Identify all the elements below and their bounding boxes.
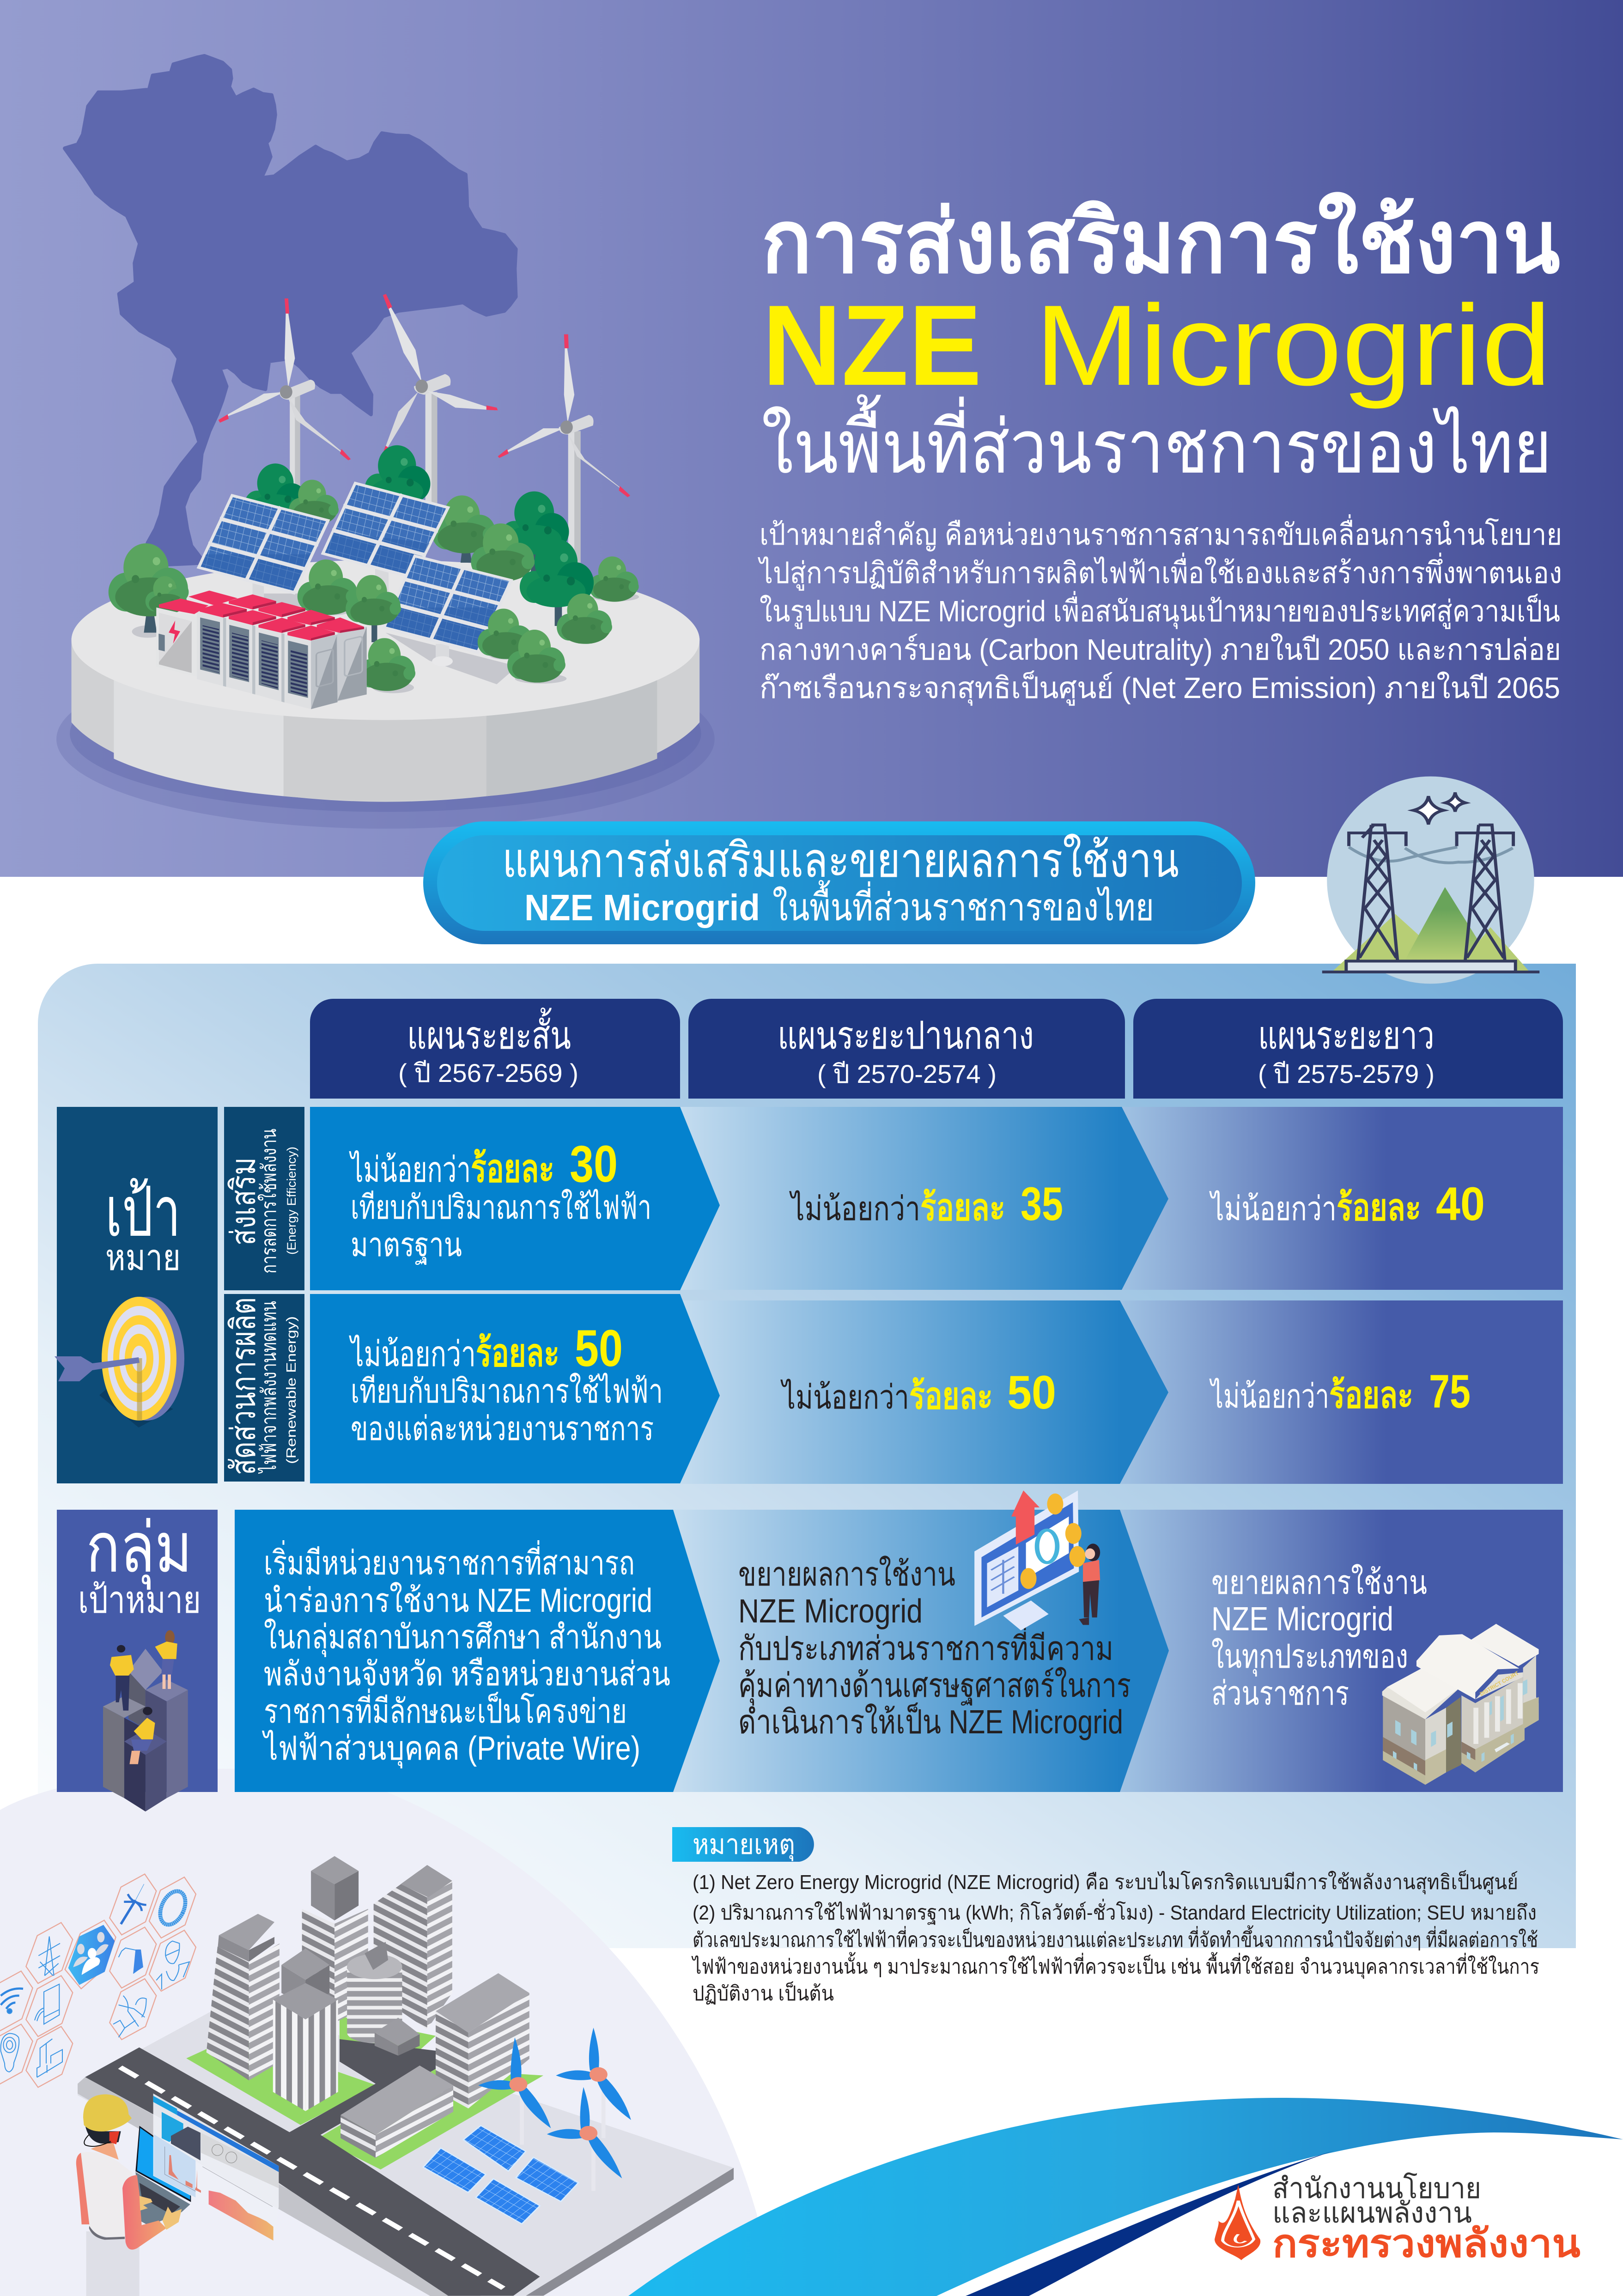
row 2: left column target 50: ของแต่ละหน่วยงานราชการ — [351, 1410, 654, 1447]
row 2: left column target 50: ร้อยละ — [476, 1331, 559, 1374]
row 3: middle column: ดำเนินการให้เป็น NZE Microgrid — [738, 1702, 1123, 1741]
row 1: left column target 30: 30 — [570, 1135, 618, 1193]
illustration: island with wind turbines, solar panels and batteries — [56, 294, 715, 829]
laptop screen — [135, 2126, 191, 2202]
header background — [0, 0, 1623, 877]
column header: short term — [310, 999, 680, 1099]
row 2: middle column target 50: 50 — [1007, 1366, 1056, 1419]
logo text: สำนักงานนโยบาย — [1272, 2172, 1481, 2205]
panel: renewable energy label — [224, 1294, 304, 1482]
row 3: middle column: คุ้มค่าทางด้านเศรษฐศาสตร์ในการ — [738, 1667, 1131, 1706]
footer swoosh — [628, 2098, 1623, 2296]
row 2: right column target 75 — [1120, 1300, 1563, 1484]
people icon — [68, 1925, 115, 1985]
row 1: left column target 30 — [310, 1107, 720, 1290]
row 2: middle column target 50: ร้อยละ — [909, 1375, 993, 1416]
person: man — [110, 1645, 134, 1711]
red cabinet tops — [159, 590, 364, 641]
row 3: middle column: ขยายผลการใช้งาน — [738, 1555, 955, 1593]
logo: Ministry of Energy: กระทรวงพลังงาน — [1272, 2222, 1580, 2265]
roads — [85, 2039, 540, 2296]
engineer — [76, 2094, 182, 2296]
buildings — [207, 1856, 529, 2158]
panel: target label: เป้า — [105, 1173, 181, 1251]
icon: monitor and woman with coins — [974, 1490, 1100, 1630]
column header: long term — [1133, 999, 1563, 1099]
notes text: (2) ปริมาณการใช้ไฟฟ้ามาตรฐาน (kWh; กิโลวัตต์-ชั่วโมง) - Standard Electricity Utilization; SEU หมายถึง — [693, 1898, 1537, 1925]
pill line 1: แผนการส่งเสริมและขยายผลการใช้งาน — [502, 834, 1179, 887]
column header: mid term — [688, 999, 1125, 1099]
panel: energy efficiency label: (Energy Efficiency) — [285, 1147, 298, 1255]
column header: short term: แผนระยะสั้น — [407, 1008, 571, 1057]
row 1: left column target 30: มาตรฐาน — [351, 1227, 462, 1265]
row 3: left column — [235, 1510, 720, 1792]
panel: target group label: เป้าหมาย — [78, 1579, 201, 1621]
panel: target group label — [57, 1509, 218, 1811]
title — [761, 192, 1560, 488]
row 2: middle column target 50 — [680, 1300, 1168, 1484]
person: woman with laptop — [129, 1707, 155, 1764]
panel: renewable energy label: สัดส่วนการผลิต — [224, 1297, 262, 1475]
bottom illustration backdrop — [0, 1769, 767, 2296]
icon: people on pillars — [103, 1630, 188, 1811]
wind turbine 3 — [498, 334, 630, 563]
notes text: (1) Net Zero Energy Microgrid (NZE Microgrid) คือ ระบบไมโครกริดแบบมีการใช้พลังงานสุทธิเป็นศูนย์ — [693, 1870, 1518, 1895]
row 2: right column target 75: ไม่น้อยกว่า — [1209, 1378, 1329, 1415]
row 2: left column target 50: ไม่น้อยกว่า — [349, 1334, 476, 1374]
logo: Ministry of Energy: และแผนพลังงาน — [1272, 2197, 1472, 2229]
person: woman standing — [155, 1630, 177, 1689]
wind turbine 2 — [381, 294, 498, 507]
row 2: right column target 75: ร้อยละ — [1329, 1374, 1413, 1415]
title line 2 bold: NZE — [762, 281, 982, 409]
cabinet with lightning mark — [156, 607, 197, 677]
column header: short term: ( ปี 2567-2569 ) — [398, 1058, 578, 1087]
pill line 2 bold: NZE Microgrid — [524, 887, 760, 928]
illustration: engineer with laptop and dashboard — [76, 2094, 279, 2296]
row 2: middle column target 50: ไม่น้อยกว่า — [780, 1379, 909, 1416]
panel: renewable energy label: ไฟฟ้าจากพลังงานทดแทน — [257, 1301, 280, 1474]
panel: target label: หมาย — [105, 1237, 181, 1278]
row 1: right column target 40: ร้อยละ — [1337, 1187, 1421, 1228]
cabinet 2 — [197, 611, 226, 687]
column header: mid term: แผนระยะปานกลาง — [778, 1014, 1034, 1057]
cabinet 3 — [226, 619, 255, 694]
row 3: right column — [1120, 1510, 1563, 1792]
keyboard — [135, 2172, 190, 2226]
trees behind panels — [245, 445, 569, 581]
wind turbine 1 — [219, 298, 351, 490]
trees in front — [109, 539, 639, 693]
solar panel A — [197, 494, 331, 607]
row 3: middle column: กับประเภทส่วนราชการที่มีความ — [738, 1626, 1113, 1667]
row 2: left column target 50: 50 — [575, 1319, 623, 1377]
note tag: หมายเหตุ — [693, 1829, 795, 1861]
row 1: left column target 30: ไม่น้อยกว่า — [349, 1150, 471, 1190]
row 3: left column: พลังงานจังหวัด หรือหน่วยงานส่วน — [264, 1656, 670, 1693]
row 3: middle column: NZE Microgrid — [738, 1593, 923, 1630]
icon: transmission towers — [1322, 777, 1539, 984]
headline pill — [423, 821, 1255, 944]
intro paragraph: ไปสู่การปฏิบัติสำหรับการผลิตไฟฟ้าเพื่อใช้เองและสร้างการพึ่งพาตนเอง — [757, 553, 1562, 591]
line icons — [1, 1884, 190, 2077]
panel: target label — [55, 1107, 218, 1483]
row 1: left column target 30: ร้อยละ — [471, 1147, 554, 1190]
row 3: left column: ในกลุ่มสถาบันการศึกษา สำนักงาน — [264, 1618, 662, 1657]
row 1: right column target 40: 40 — [1436, 1178, 1485, 1230]
column header: long term: แผนระยะยาว — [1258, 1014, 1435, 1057]
city ground — [78, 1999, 734, 2296]
green lawns — [186, 2036, 377, 2125]
pill line 2 regular: ในพื้นที่ส่วนราชการของไทย — [772, 880, 1154, 929]
row 1: middle column target 35: ร้อยละ — [920, 1187, 1005, 1228]
title line 2 regular: Microgrid — [1035, 281, 1551, 409]
main panel background — [38, 964, 1576, 1948]
back cabinet side — [338, 627, 367, 701]
panel: energy efficiency label: การลดการใช้พลังงาน — [257, 1129, 280, 1274]
intro paragraph — [757, 514, 1562, 706]
island body — [72, 560, 699, 802]
illustration: smart city — [78, 1856, 734, 2296]
row 2: left column target 50: เทียบกับปริมาณการใช้ไฟฟ้า — [351, 1373, 663, 1410]
row 3: right column: ส่วนราชการ — [1211, 1675, 1349, 1712]
logo: Ministry of Energy — [1215, 2172, 1580, 2265]
solar panel B — [321, 481, 450, 594]
notes text: ปฏิบัติงาน เป็นต้น — [693, 1981, 834, 2005]
island shadow — [56, 650, 715, 829]
panel: energy efficiency label: ส่งเสริม — [224, 1157, 262, 1245]
row 1: middle column target 35 — [680, 1107, 1168, 1290]
intro paragraph: ก๊าซเรือนกระจกสุทธิเป็นศูนย์ (Net Zero Emission) ภายในปี 2065 — [760, 671, 1560, 706]
row 3: right column: NZE Microgrid — [1211, 1601, 1393, 1638]
hexagon outlines — [0, 1874, 196, 2087]
cabinet 5 — [285, 634, 338, 709]
panel: target group label: กลุ่ม — [86, 1509, 192, 1590]
icon: flame — [1215, 2185, 1260, 2260]
row 3: left column: ไฟฟ้าส่วนบุคคล (Private Wire) — [262, 1730, 640, 1768]
row 3: left column: เริ่มมีหน่วยงานราชการที่สามารถ — [264, 1540, 635, 1582]
row 2: right column target 75: 75 — [1429, 1365, 1471, 1418]
Thailand map silhouette — [65, 56, 516, 565]
row 3: right column: ในทุกประเภทของ — [1211, 1638, 1408, 1676]
row 3: right column: ขยายผลการใช้งาน — [1211, 1564, 1427, 1601]
row 3: left column: นำร่องการใช้งาน NZE Microgrid — [264, 1582, 652, 1619]
panel: renewable energy label: (Renewable Energy) — [284, 1316, 299, 1464]
cabinet 4 — [255, 627, 285, 703]
notes text — [691, 1870, 1539, 2005]
icon: government building: DISTRICT COURT — [1479, 1670, 1520, 1697]
row 2: left column target 50 — [310, 1294, 720, 1483]
battery cabinets — [156, 590, 367, 709]
dashboard — [153, 2094, 279, 2241]
row 1: right column target 40: ไม่น้อยกว่า — [1209, 1190, 1337, 1227]
row 1: middle column target 35: 35 — [1021, 1178, 1063, 1230]
column header: long term: ( ปี 2575-2579 ) — [1258, 1059, 1435, 1088]
row 1: middle column target 35: ไม่น้อยกว่า — [789, 1190, 920, 1227]
panel: energy efficiency label — [224, 1107, 304, 1290]
row 1: left column target 30: เทียบกับปริมาณการใช้ไฟฟ้า — [351, 1189, 651, 1226]
row 3: middle column — [673, 1510, 1169, 1792]
column header: mid term: ( ปี 2570-2574 ) — [817, 1059, 997, 1088]
intro paragraph: กลางทางคาร์บอน (Carbon Neutrality) ภายในปี 2050 และการปล่อย — [760, 633, 1561, 666]
icon: target with arrow — [55, 1297, 184, 1427]
illustration: hexagon technology icons — [0, 1874, 196, 2087]
row 3: left column: ราชการที่มีลักษณะเป็นโครงข่าย — [264, 1689, 627, 1730]
icon: government building — [1382, 1624, 1539, 1785]
solar panel C — [382, 554, 517, 684]
wind turbines — [478, 2028, 631, 2191]
footer dark swoosh — [966, 2150, 1335, 2296]
row 1: right column target 40 — [1122, 1107, 1563, 1290]
solar panels — [423, 2126, 578, 2224]
title line 1: การส่งเสริมการใช้งาน — [761, 192, 1560, 291]
